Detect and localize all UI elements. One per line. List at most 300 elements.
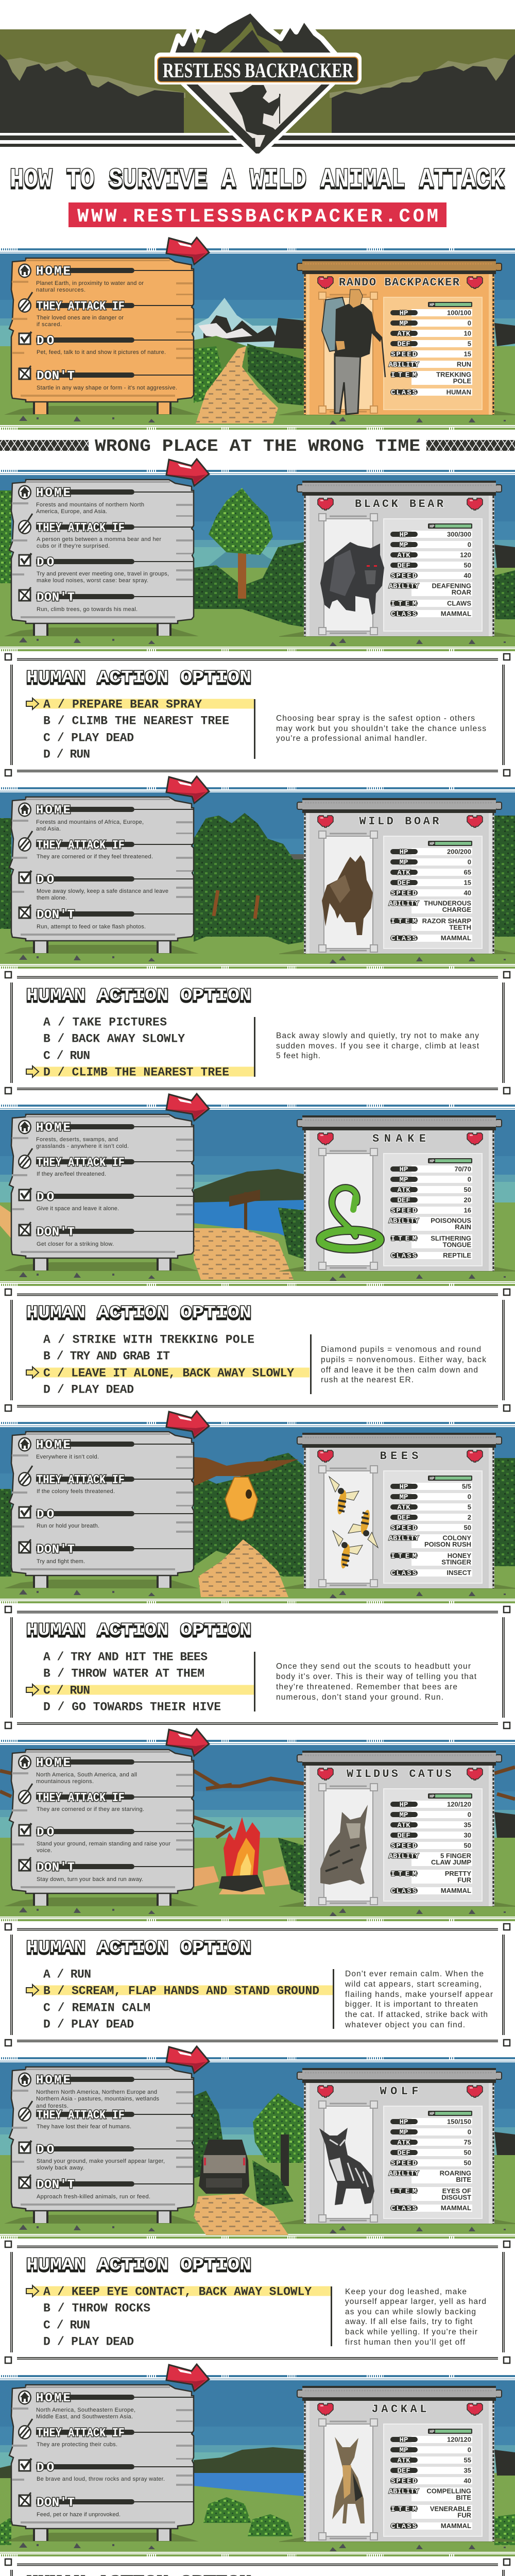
options bbox=[26, 1333, 310, 1396]
explanation: they're threatened. Remember that bees are bbox=[276, 1683, 457, 1691]
do row bbox=[19, 2141, 165, 2171]
logo: Restless Backpacker: RESTLESS BACKPACKER bbox=[163, 59, 354, 82]
don't row: Startle in any way shape or form - it's not aggressive. bbox=[37, 385, 177, 391]
stats: 70/70 bbox=[454, 1165, 471, 1173]
options bbox=[26, 1016, 254, 1079]
options: D / CLIMB THE NEAREST TREE bbox=[43, 1065, 229, 1079]
stats: SLITHERING bbox=[431, 1234, 471, 1242]
stats: ATK bbox=[397, 2456, 410, 2465]
stats: HP bbox=[430, 2430, 435, 2434]
panel heading: HUMAN ACTION OPTION bbox=[26, 1938, 251, 1957]
stats: 200/200 bbox=[447, 848, 471, 855]
they attack if row: They are cornered or if they feel threatened. bbox=[37, 854, 153, 860]
explanation: Once they send out the scouts to headbutt your bbox=[276, 1662, 471, 1671]
stats: POISON RUSH bbox=[424, 1540, 471, 1548]
stats: 50 bbox=[464, 2159, 471, 2167]
do row: DO bbox=[37, 1191, 54, 1205]
stats: HP bbox=[430, 2112, 435, 2116]
scene: Snake bbox=[0, 1094, 515, 1286]
jackal illustration bbox=[332, 2437, 365, 2523]
home row bbox=[18, 803, 144, 832]
do row: Move away slowly, keep a safe distance and leave bbox=[37, 888, 168, 894]
stats: 5/5 bbox=[462, 1483, 471, 1490]
stats: HP bbox=[430, 842, 435, 846]
they attack if row bbox=[18, 831, 153, 860]
stats: MP bbox=[400, 2129, 408, 2137]
stats: SPEED bbox=[391, 889, 417, 897]
stats: 35 bbox=[464, 1821, 471, 1829]
scroll: Rando stat card bbox=[297, 259, 502, 415]
stats: MAMMAL bbox=[441, 610, 471, 617]
arrow bbox=[166, 1729, 209, 1756]
do row: Give it space and leave it alone. bbox=[37, 1206, 119, 1212]
explanation: yourself appear larger, yell as hard bbox=[345, 2297, 486, 2306]
stats: COMPELLING bbox=[426, 2487, 471, 2495]
stats: DISGUST bbox=[441, 2194, 471, 2201]
sign: wolf habitat and behaviour bbox=[9, 2067, 194, 2223]
they attack if row: THEY ATTACK IF bbox=[37, 839, 125, 853]
home row: America, Europe, and Asia. bbox=[36, 509, 107, 515]
stats: ROAR bbox=[452, 588, 472, 596]
stats: 120/120 bbox=[447, 1800, 471, 1808]
home row: HOME bbox=[36, 265, 71, 279]
home row: North America, Southeastern Europe, bbox=[36, 2407, 135, 2413]
boar illustration bbox=[322, 855, 373, 935]
stats: RUN bbox=[457, 361, 471, 368]
stats: ABILITY bbox=[389, 361, 419, 369]
do row: DO bbox=[37, 334, 54, 348]
explanation: off and leave it be then calm down and bbox=[321, 1366, 478, 1375]
stats: 50 bbox=[464, 2148, 471, 2157]
explanation: Keep your dog leashed, make bbox=[345, 2287, 467, 2296]
do row: Stand your ground, remain standing and raise your bbox=[37, 1841, 170, 1847]
they attack if row: THEY ATTACK IF bbox=[37, 521, 125, 535]
options: C / LEAVE IT ALONE, BACK AWAY SLOWLY bbox=[43, 1366, 294, 1380]
home row bbox=[18, 1120, 129, 1149]
panel heading: HUMAN ACTION OPTION bbox=[26, 2258, 251, 2277]
bear illustration bbox=[320, 542, 384, 615]
they attack if row bbox=[18, 1148, 125, 1177]
do row bbox=[19, 1505, 99, 1529]
stats: MP bbox=[400, 1176, 408, 1184]
don't row bbox=[19, 1857, 143, 1883]
stats: MP bbox=[400, 1493, 408, 1501]
stats: 0 bbox=[468, 1176, 471, 1183]
stats: DEAFENING bbox=[432, 582, 471, 589]
don't row bbox=[19, 587, 138, 613]
stats: MP bbox=[400, 858, 408, 867]
stats: MAMMAL bbox=[441, 1887, 471, 1894]
scroll: wolf stat card: WOLF bbox=[380, 2085, 418, 2098]
stats: 35 bbox=[464, 2467, 471, 2474]
stats: MP bbox=[400, 2446, 408, 2454]
scenery: tree and bushes bbox=[0, 488, 515, 627]
don't row: Approach fresh-killed animals, run or feed. bbox=[37, 2194, 150, 2200]
panel heading: HUMAN ACTION OPTION bbox=[26, 1623, 251, 1642]
stats: 40 bbox=[464, 2477, 471, 2484]
scroll: jackal stat card: JACKAL bbox=[372, 2403, 426, 2416]
panel heading: HUMAN ACTION OPTION bbox=[26, 2256, 251, 2275]
stats: 0 bbox=[468, 1493, 471, 1500]
don't row bbox=[19, 2175, 150, 2200]
stats: HP bbox=[400, 309, 408, 317]
they attack if row: THEY ATTACK IF bbox=[37, 1473, 125, 1487]
do row: Stand your ground, make yourself appear larger, bbox=[37, 2158, 165, 2164]
do row: Pet, feed, talk to it and show it pictures of nature. bbox=[37, 349, 166, 355]
stats: MAMMAL bbox=[441, 934, 471, 942]
stats: FUR bbox=[457, 2511, 472, 2519]
stats: ATK bbox=[397, 1822, 410, 1830]
stats: SPEED bbox=[391, 2160, 417, 2168]
explanation bbox=[321, 1345, 486, 1384]
home row: HOME bbox=[36, 486, 71, 500]
stats: ABILITY bbox=[389, 1853, 419, 1861]
home row bbox=[18, 2391, 135, 2420]
stats bbox=[384, 2424, 482, 2536]
don't row: Try and fight them. bbox=[37, 1558, 85, 1565]
scroll: wild cat stat card bbox=[297, 1751, 502, 1906]
scenery: mountain and path bbox=[194, 298, 515, 423]
stats: HUMAN bbox=[447, 388, 471, 396]
options: A / KEEP EYE CONTACT, BACK AWAY SLOWLY bbox=[43, 2285, 312, 2299]
explanation: Back away slowly and quietly, try not to make any bbox=[276, 1031, 479, 1040]
do row: Try and prevent ever meeting one, travel in groups, bbox=[37, 571, 169, 577]
snake illustration bbox=[320, 1188, 380, 1249]
stats: TONGUE bbox=[443, 1241, 471, 1249]
don't row: DON'T bbox=[37, 1543, 75, 1557]
options: B / CLIMB THE NEAREST TREE bbox=[43, 714, 229, 727]
stats: ABILITY bbox=[389, 1217, 419, 1225]
panel heading: HUMAN ACTION OPTION bbox=[26, 988, 251, 1007]
do row: Be brave and loud, throw rocks and spray water. bbox=[37, 2476, 165, 2482]
stats bbox=[384, 519, 482, 631]
stats: 15 bbox=[464, 350, 471, 358]
stats: ITEM bbox=[391, 600, 417, 608]
they attack if row: THEY ATTACK IF bbox=[37, 2109, 125, 2123]
scroll: boar stat card bbox=[297, 798, 502, 954]
options: B / BACK AWAY SLOWLY bbox=[43, 1032, 185, 1046]
scroll: snake stat card: SNAKE bbox=[372, 1132, 426, 1145]
options: C / REMAIN CALM bbox=[43, 2001, 150, 2014]
stats: 16 bbox=[464, 1207, 471, 1214]
stats: ABILITY bbox=[389, 2487, 419, 2496]
explanation: rush at the nearest ER. bbox=[321, 1376, 414, 1384]
do row bbox=[19, 553, 169, 584]
sign: snake habitat and behaviour bbox=[9, 1114, 194, 1270]
home row bbox=[18, 1755, 137, 1785]
stats: 20 bbox=[464, 1196, 471, 1204]
they attack if row bbox=[18, 1466, 125, 1495]
explanation bbox=[345, 1970, 493, 2029]
stats: CLAW JUMP bbox=[431, 1858, 471, 1866]
don't row bbox=[19, 1222, 114, 1247]
panel heading: HUMAN ACTION OPTION bbox=[26, 668, 251, 687]
stats: DEF bbox=[397, 1514, 410, 1522]
options: D / PLAY DEAD bbox=[43, 2335, 134, 2348]
scroll: wild cat stat card: WILDUS CATUS bbox=[347, 1768, 452, 1781]
don't row: DON'T bbox=[37, 1861, 75, 1875]
don't row: DON'T bbox=[37, 2178, 75, 2192]
stats: 50 bbox=[464, 1841, 471, 1850]
panel heading: HUMAN ACTION OPTION bbox=[26, 986, 251, 1005]
stats: 55 bbox=[464, 2456, 471, 2464]
action panel: wolf bbox=[5, 2241, 510, 2363]
stats: DEF bbox=[397, 340, 410, 348]
website banner: WWW.RESTLESSBACKPACKER.COM bbox=[77, 206, 438, 228]
do row: DO bbox=[37, 2461, 54, 2475]
do row bbox=[19, 332, 166, 355]
stats: ITEM bbox=[391, 371, 417, 379]
stats: 300/300 bbox=[447, 531, 471, 538]
action panel: jackal bbox=[5, 2559, 510, 2576]
do row: slowly back away. bbox=[37, 2165, 84, 2171]
stats: 30 bbox=[464, 1831, 471, 1839]
do row bbox=[19, 1823, 170, 1854]
options: C / RUN bbox=[43, 2318, 90, 2332]
stats: TREKKING bbox=[436, 371, 471, 378]
options: B / TRY AND GRAB IT bbox=[43, 1350, 170, 1363]
arrow bbox=[166, 459, 209, 486]
stats: 75 bbox=[464, 2138, 471, 2146]
home row bbox=[18, 2072, 160, 2109]
stats: HP bbox=[430, 1159, 435, 1164]
stats: 15 bbox=[464, 879, 471, 886]
home row bbox=[18, 485, 144, 515]
stats: HP bbox=[430, 1794, 435, 1799]
they attack if row bbox=[18, 292, 125, 328]
do row: them alone. bbox=[37, 895, 67, 901]
stats: 40 bbox=[464, 572, 471, 579]
stats: DEF bbox=[397, 879, 410, 887]
stats: MAMMAL bbox=[441, 2204, 471, 2212]
explanation: back while yelling. If you're their bbox=[345, 2328, 477, 2336]
stats: RAIN bbox=[455, 1223, 471, 1231]
stats: HP bbox=[400, 848, 408, 856]
panel heading: HUMAN ACTION OPTION bbox=[26, 1621, 251, 1640]
stats bbox=[384, 836, 482, 948]
home row: Middle East, and Southwestern Asia. bbox=[36, 2414, 133, 2420]
stats: ATK bbox=[397, 869, 410, 877]
don't row bbox=[19, 366, 177, 391]
scroll: Rando stat card: RANDO BACKPACKER bbox=[339, 276, 460, 289]
scroll: wolf stat card bbox=[297, 2068, 502, 2224]
stats: CLASS bbox=[391, 1887, 417, 1895]
stats: REPTILE bbox=[443, 1251, 471, 1259]
stats: 5 bbox=[468, 340, 471, 347]
explanation: numerous, don't stand your ground. Run. bbox=[276, 1693, 443, 1702]
stats: 120/120 bbox=[447, 2436, 471, 2443]
stats: 50 bbox=[464, 1524, 471, 1531]
don't row: DON'T bbox=[37, 2496, 75, 2510]
they attack if row: THEY ATTACK IF bbox=[37, 2427, 125, 2441]
options: C / RUN bbox=[43, 1684, 90, 1697]
stats: CLASS bbox=[391, 935, 417, 943]
stats: POISONOUS bbox=[431, 1217, 471, 1224]
stats: EYES OF bbox=[442, 2187, 471, 2195]
scenery: forest bbox=[0, 813, 515, 944]
explanation: the cat. If attacked, strike back with bbox=[345, 2010, 488, 2019]
stats: 50 bbox=[464, 562, 471, 569]
stats: SPEED bbox=[391, 1524, 417, 1532]
don't row: DON'T bbox=[37, 1226, 75, 1240]
home row: grasslands - anywhere it isn't cold. bbox=[36, 1143, 129, 1149]
stats: CLASS bbox=[391, 2522, 417, 2531]
stats: MP bbox=[400, 541, 408, 549]
don't row bbox=[19, 1539, 85, 1565]
sign: boar habitat and behaviour bbox=[9, 797, 194, 953]
home row: mountainous regions. bbox=[36, 1778, 94, 1785]
stats bbox=[384, 1154, 482, 1266]
they attack if row bbox=[18, 514, 161, 549]
hiker figure bbox=[322, 290, 385, 414]
explanation bbox=[345, 2287, 486, 2347]
explanation: Choosing bear spray is the safest option - others bbox=[276, 714, 475, 723]
stats: 2 bbox=[468, 1514, 471, 1521]
stats: RAZOR SHARP bbox=[422, 917, 471, 925]
stats: DEF bbox=[397, 1196, 410, 1205]
stats: VENERABLE bbox=[430, 2505, 471, 2513]
explanation bbox=[276, 714, 486, 743]
scroll: bear stat card: BLACK BEAR bbox=[355, 498, 444, 511]
do row: make loud noises, worst case: bear spray. bbox=[37, 578, 148, 584]
scene: Black Bear bbox=[0, 459, 515, 651]
stats bbox=[384, 1789, 482, 1901]
stats: HP bbox=[400, 2119, 408, 2127]
options: D / RUN bbox=[43, 748, 90, 761]
action panel: snake bbox=[5, 1289, 510, 1411]
do row: DO bbox=[37, 1826, 54, 1840]
stats: 0 bbox=[468, 319, 471, 327]
home row: and forests. bbox=[36, 2103, 68, 2109]
stats bbox=[384, 1471, 482, 1583]
home row: and Asia. bbox=[36, 826, 61, 832]
options bbox=[26, 1651, 254, 1714]
stats: COLONY bbox=[442, 1534, 471, 1541]
options: A / TRY AND HIT THE BEES bbox=[43, 1651, 208, 1664]
explanation: may work but you shouldn't take the chance unless bbox=[276, 724, 486, 733]
don't row: Stay down, turn your back and run away. bbox=[37, 1876, 143, 1883]
explanation: flailing hands, make yourself appear bbox=[345, 1990, 493, 1999]
stats: ABILITY bbox=[389, 582, 419, 590]
don't row: Feed, pet or haze if unprovoked. bbox=[37, 2512, 121, 2518]
stats: ITEM bbox=[391, 1870, 417, 1878]
options bbox=[26, 698, 254, 761]
stats: DEF bbox=[397, 2149, 410, 2158]
scenery: lake, signpost and path bbox=[0, 1169, 304, 1280]
stats: TEETH bbox=[449, 923, 471, 931]
stats: HP bbox=[430, 524, 435, 529]
stats: DEF bbox=[397, 562, 410, 570]
options bbox=[26, 2285, 331, 2348]
they attack if row bbox=[18, 2101, 131, 2130]
home row: Forests, deserts, swamps, and bbox=[36, 1137, 118, 1143]
home row: Northern Asia - pastures, mountains, wetlands bbox=[36, 2096, 160, 2102]
scroll: bear stat card bbox=[297, 481, 502, 636]
home row: Forests and mountains of Africa, Europe, bbox=[36, 819, 144, 825]
explanation: 5 feet high. bbox=[276, 1052, 320, 1060]
options: C / PLAY DEAD bbox=[43, 732, 134, 745]
home row: HOME bbox=[36, 2074, 71, 2088]
do row: Run or hold your breath. bbox=[37, 1523, 99, 1529]
do row bbox=[19, 871, 168, 901]
options: A / TAKE PICTURES bbox=[43, 1016, 167, 1029]
don't row bbox=[19, 2493, 121, 2518]
stats: 150/150 bbox=[447, 2117, 471, 2126]
stats: CLASS bbox=[391, 1569, 417, 1578]
stats: ATK bbox=[397, 551, 410, 560]
scene: Wolf bbox=[0, 2046, 515, 2239]
scenery: trees, truck and path bbox=[194, 2091, 515, 2235]
they attack if row bbox=[18, 2419, 125, 2448]
wolf illustration bbox=[319, 2128, 374, 2205]
they attack if row: if scared. bbox=[37, 321, 62, 328]
stats: SPEED bbox=[391, 350, 417, 359]
stats: ITEM bbox=[391, 2505, 417, 2514]
home row: HOME bbox=[36, 1121, 71, 1135]
sign: bear habitat and behaviour bbox=[9, 480, 194, 636]
home row: HOME bbox=[36, 1438, 71, 1452]
bees illustration bbox=[329, 1477, 378, 1569]
home row: HOME bbox=[36, 2392, 71, 2405]
arrow bbox=[166, 238, 209, 264]
they attack if row: cubs or if they're surprised. bbox=[37, 543, 110, 549]
stats: 0 bbox=[468, 541, 471, 548]
stats: BITE bbox=[456, 2494, 471, 2501]
stats: POLE bbox=[453, 377, 471, 385]
do row: DO bbox=[37, 2143, 54, 2157]
action panel: bear bbox=[5, 654, 510, 776]
don't row: DON'T bbox=[37, 908, 75, 922]
stats: 0 bbox=[468, 858, 471, 866]
scene: Jackal bbox=[0, 2364, 515, 2556]
stats: 120 bbox=[460, 551, 471, 558]
sign: Rando habitat and behaviour bbox=[9, 258, 194, 414]
don't row: Get closer for a striking blow. bbox=[37, 1241, 114, 1247]
do row bbox=[19, 2459, 165, 2482]
explanation: wild cat appears, start screaming, bbox=[345, 1980, 482, 1989]
scene: Wildus Catus bbox=[0, 1729, 515, 1921]
do row: DO bbox=[37, 1508, 54, 1522]
action panel: boar bbox=[5, 972, 510, 1094]
section heading: wrong place at the wrong time bbox=[0, 437, 515, 456]
stats: MP bbox=[400, 319, 408, 328]
action panel: bees bbox=[5, 1606, 510, 1728]
they attack if row bbox=[18, 1784, 144, 1812]
options bbox=[26, 1968, 333, 2031]
stats: HP bbox=[400, 531, 408, 539]
they attack if row: THEY ATTACK IF bbox=[37, 1156, 125, 1170]
stats: 100/100 bbox=[447, 309, 471, 316]
stats: SPEED bbox=[391, 1842, 417, 1851]
they attack if row: Their loved ones are in danger or bbox=[37, 315, 124, 321]
sign: wild cat habitat and behaviour bbox=[9, 1750, 194, 1906]
stats: CLASS bbox=[391, 2205, 417, 2213]
home row: Planet Earth, in proximity to water and or bbox=[36, 280, 144, 286]
they attack if row: If they are/feel threatened. bbox=[37, 1171, 106, 1177]
stats: BITE bbox=[456, 2176, 471, 2183]
stats: STINGER bbox=[441, 1558, 472, 1566]
stats: ABILITY bbox=[389, 1534, 419, 1543]
stats: CLAWS bbox=[447, 600, 471, 607]
options: A / STRIKE WITH TREKKING POLE bbox=[43, 1333, 254, 1347]
scene: Wild Boar bbox=[0, 776, 515, 969]
home row: Northern North America, Northern Europe and bbox=[36, 2089, 157, 2095]
options: A / RUN bbox=[43, 1968, 91, 1981]
options: A / PREPARE BEAR SPRAY bbox=[43, 698, 202, 711]
stats: ABILITY bbox=[389, 2170, 419, 2178]
stats: 10 bbox=[464, 330, 471, 337]
sign: bee habitat and behaviour bbox=[9, 1432, 194, 1588]
